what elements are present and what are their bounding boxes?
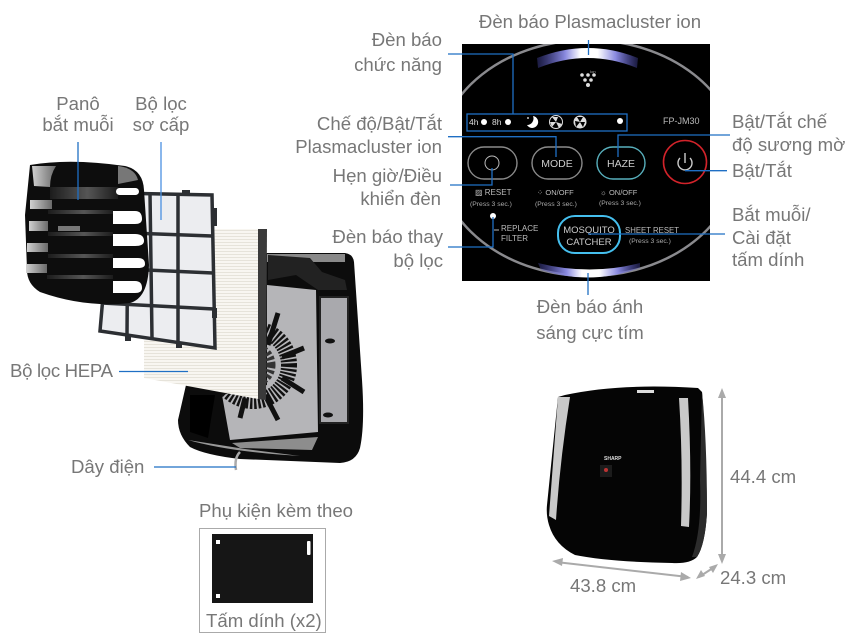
label: timer: Hẹn giờ/Điều <box>333 165 442 186</box>
product photo: SHARP <box>604 456 622 462</box>
indicator row: 8h <box>492 117 502 127</box>
replace filter indicator <box>490 213 538 243</box>
replace filter indicator: REPLACE <box>501 224 538 233</box>
accessory box: Tấm dính (x2) <box>206 610 322 631</box>
replace filter indicator: FILTER <box>501 234 528 243</box>
haze button: (Press 3 sec.) <box>599 200 641 207</box>
pre-filter <box>100 190 217 348</box>
label: replace filter: bộ lọc <box>393 250 443 271</box>
mode button: (Press 3 sec.) <box>535 201 577 208</box>
accessory box <box>200 528 326 632</box>
label: height: 44.4 cm <box>730 466 796 487</box>
label: accessories heading: Phụ kiện kèm theo <box>199 500 353 521</box>
label: haze: độ sương mờ <box>732 134 845 155</box>
label: haze: Bật/Tắt chế <box>732 111 828 132</box>
label: UV indicator: Đèn báo ánh <box>537 296 643 317</box>
haze button: HAZE <box>607 158 635 170</box>
label: pre-filter: sơ cấp <box>133 114 189 135</box>
indicator row <box>467 114 627 131</box>
label: pre-filter: Bộ lọc <box>135 93 187 114</box>
mosquito catcher button: CATCHER <box>566 237 612 248</box>
rear unit housing <box>178 253 363 470</box>
label: power cord: Dây điện <box>71 456 144 477</box>
timer button <box>468 147 517 208</box>
mosquito catcher button: (Press 3 sec.) <box>629 238 671 245</box>
mosquito catcher button: MOSQUITO <box>563 225 615 236</box>
label: replace filter: Đèn báo thay <box>332 226 444 247</box>
label: mode: Chế độ/Bật/Tắt <box>317 113 443 134</box>
timer button: ▨ RESET <box>475 188 512 197</box>
mode button <box>532 147 582 208</box>
ion logo: Ion <box>590 69 596 74</box>
label: width: 43.8 cm <box>570 575 636 596</box>
label: depth: 24.3 cm <box>720 567 786 588</box>
HEPA filter <box>144 229 267 400</box>
label: plasmacluster indicator: Đèn báo Plasmacluster ion <box>479 11 701 32</box>
ring <box>462 44 710 278</box>
label: mosquito catcher: Bắt muỗi/ <box>732 204 811 225</box>
front panel <box>25 162 149 304</box>
dimension arrows <box>552 388 726 581</box>
label: panel: Panô <box>56 93 100 114</box>
label: power: Bật/Tắt <box>732 160 793 181</box>
product photo <box>547 387 707 563</box>
haze button: ☼ ON/OFF <box>600 188 638 197</box>
mode button: ⁘ ON/OFF <box>537 188 574 197</box>
label lines panel <box>448 40 730 295</box>
label: mode: Plasmacluster ion <box>295 136 442 157</box>
power button <box>664 140 706 184</box>
label: mosquito catcher: tấm dính <box>732 249 804 270</box>
model name: FP-JM30 <box>663 116 700 126</box>
mosquito catcher button <box>558 216 679 253</box>
label: function indicator: Đèn báo <box>372 29 442 50</box>
label: panel: bắt muỗi <box>42 114 114 135</box>
mosquito catcher button: SHEET RESET <box>625 226 679 235</box>
indicator row: 4h <box>469 117 479 127</box>
label: HEPA: Bộ lọc HEPA <box>10 360 114 381</box>
fan <box>217 313 304 420</box>
label: UV indicator: sáng cực tím <box>536 322 644 343</box>
mode button: MODE <box>541 158 573 170</box>
label: function indicator: chức năng <box>354 54 442 75</box>
timer button: (Press 3 sec.) <box>470 201 512 208</box>
label: mosquito catcher: Cài đặt <box>732 227 792 248</box>
control panel <box>462 44 710 281</box>
haze button <box>597 147 645 207</box>
ion logo <box>580 69 596 87</box>
label: timer: khiển đèn <box>360 188 441 209</box>
label lines left <box>78 142 236 467</box>
